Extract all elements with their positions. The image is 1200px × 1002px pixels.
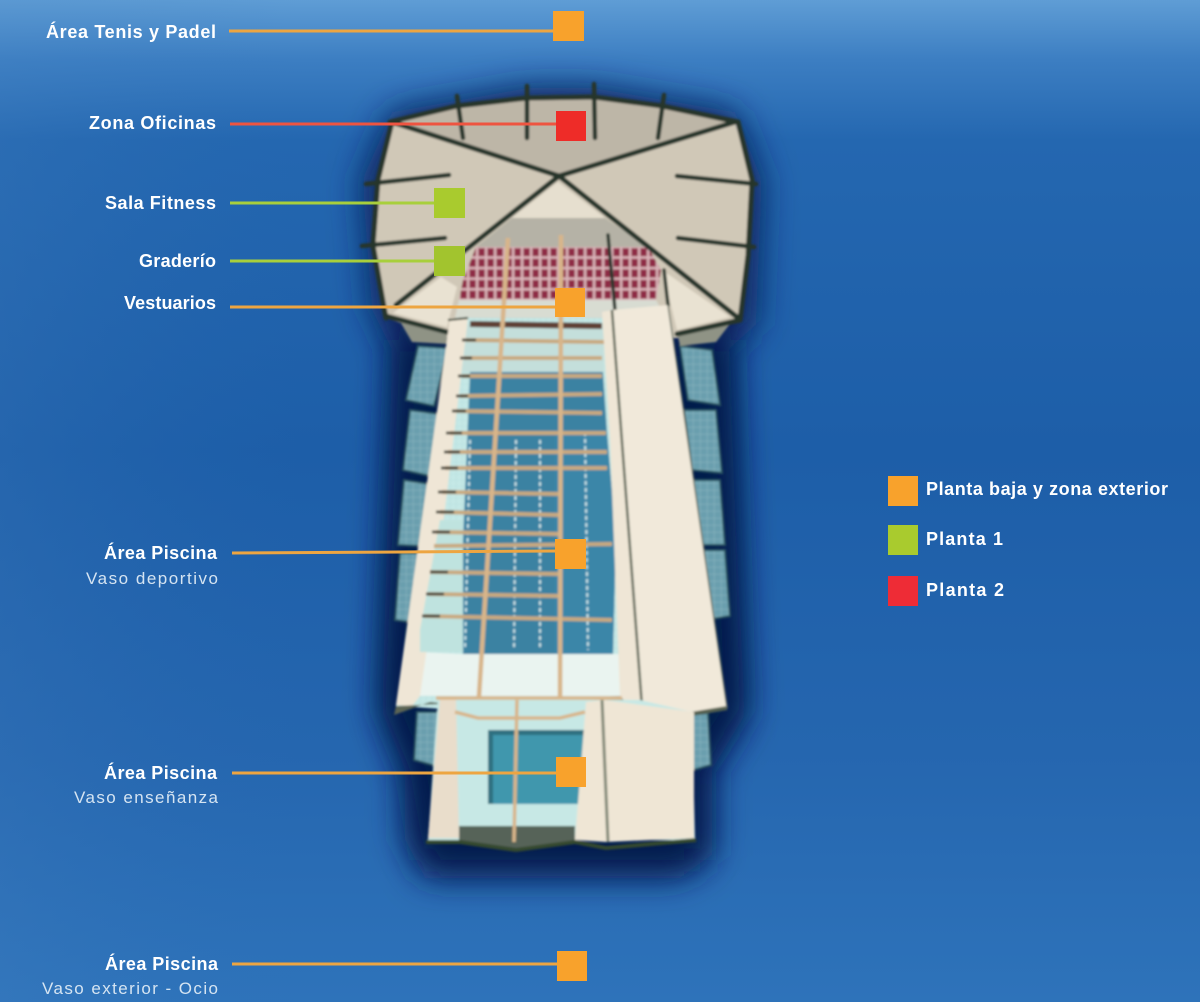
label: Área Tenis y Padel <box>46 11 584 42</box>
teaching pool <box>488 730 584 804</box>
legend item: Planta 2: Planta 2 <box>926 580 1004 600</box>
dark ledge <box>459 826 575 848</box>
label: Vestuarios: Vestuarios <box>124 293 216 313</box>
roof <box>362 84 756 346</box>
seating stands <box>459 247 661 300</box>
legend item: Planta baja y zona exterior <box>888 476 1168 506</box>
central opening <box>512 182 605 218</box>
label: Graderío: Graderío <box>139 251 216 271</box>
building <box>362 84 756 850</box>
building shadow <box>362 88 762 878</box>
ledge trusses <box>436 698 622 842</box>
pool lane lines <box>465 432 588 650</box>
dark truss ends <box>422 340 476 616</box>
main pool <box>463 372 616 654</box>
label: Área Piscina, Vaso enseñanza <box>74 757 586 807</box>
left cream strip <box>396 318 468 706</box>
label: Área Piscina, Vaso enseñanza: Área Piscina <box>104 762 218 783</box>
label: Graderío <box>139 246 465 276</box>
lower teaching pool hall <box>426 698 696 850</box>
main pool hall <box>394 235 642 722</box>
label: Área Piscina, Vaso exterior - Ocio: Área Piscina <box>105 953 219 974</box>
white tile floor <box>420 652 622 696</box>
label: Área Piscina, Vaso deportivo: Vaso deportivo <box>86 569 218 588</box>
legend item: Planta 1: Planta 1 <box>926 529 1003 549</box>
label: Área Piscina, Vaso exterior - Ocio <box>42 951 587 998</box>
label: Zona Oficinas: Zona Oficinas <box>89 113 216 133</box>
left cream column <box>428 698 459 838</box>
label: Área Piscina, Vaso enseñanza: Vaso enseñanza <box>74 788 219 807</box>
roof beams <box>362 84 756 334</box>
label: Área Piscina, Vaso deportivo: Área Piscina <box>104 542 218 563</box>
label: Área Tenis y Padel: Área Tenis y Padel <box>46 21 216 42</box>
label: Vestuarios <box>124 288 585 317</box>
legend item: Planta baja y zona exterior: Planta baja y zona exterior <box>926 479 1168 499</box>
lower roof corners <box>393 277 457 327</box>
side glass panels <box>395 346 730 771</box>
label: Sala Fitness: Sala Fitness <box>105 193 216 213</box>
legend item: Planta 2 <box>888 576 1004 606</box>
roof trusses vertical <box>478 235 561 720</box>
roof trusses horizontal <box>424 324 612 620</box>
label: Zona Oficinas <box>89 111 586 141</box>
upper pale glazing <box>462 325 604 372</box>
roof sections <box>392 97 735 176</box>
legend item: Planta 1 <box>888 525 1003 555</box>
legend <box>888 476 1168 606</box>
label: Área Piscina, Vaso exterior - Ocio: Vaso exterior - Ocio <box>42 979 218 998</box>
label: Sala Fitness <box>105 188 465 218</box>
label: Área Piscina, Vaso deportivo <box>86 539 586 588</box>
right cream panels <box>575 700 694 842</box>
right cream roof panel <box>602 305 727 722</box>
